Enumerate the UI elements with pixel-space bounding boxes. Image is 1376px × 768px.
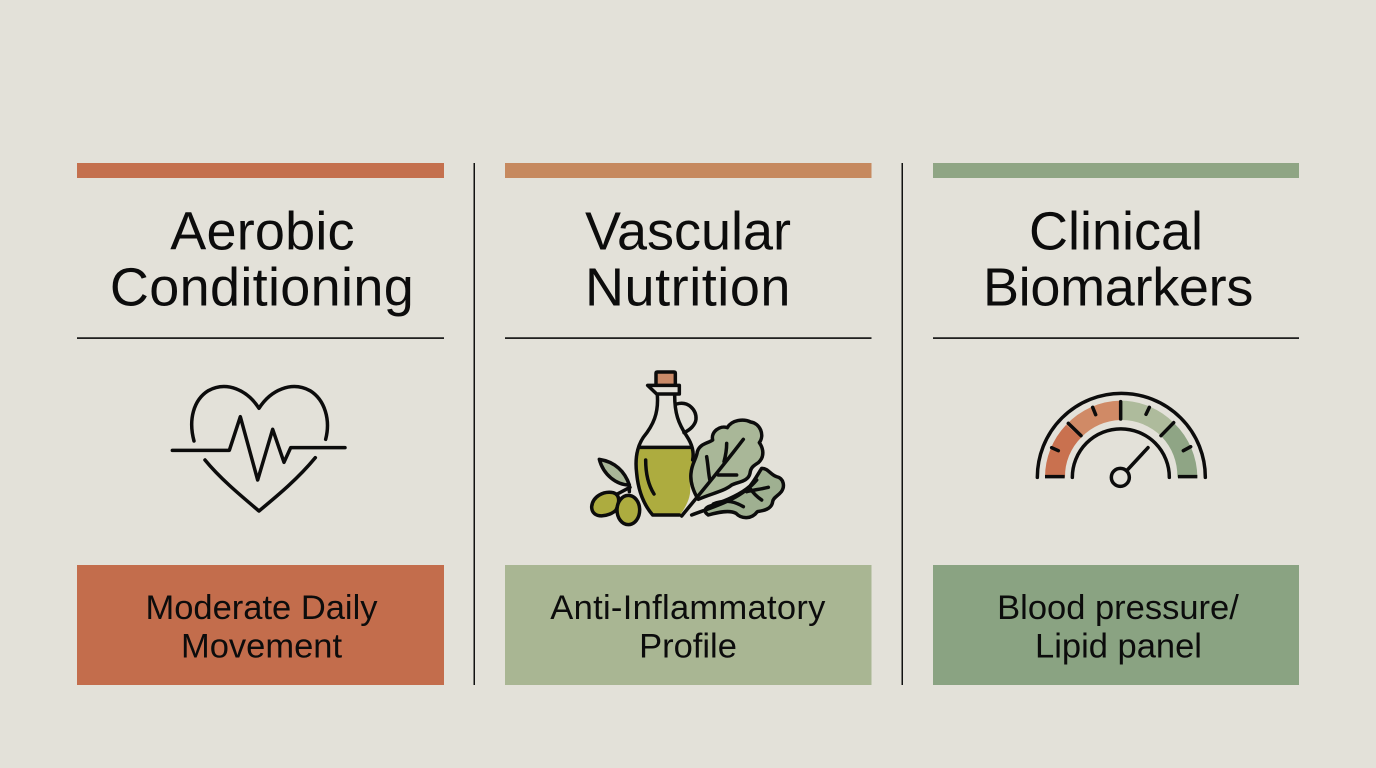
- accent bar: [77, 163, 444, 178]
- callout: Blood pressure / Lipid panel: Lipid panel: [1035, 628, 1202, 666]
- accent bar: [933, 163, 1299, 178]
- icon: blood pressure gauge: [1037, 393, 1205, 486]
- heading: Aerobic: [170, 202, 355, 262]
- callout: Blood pressure / Lipid panel: Blood pressure/: [997, 589, 1239, 627]
- callout: Moderate Daily Movement: [77, 565, 444, 685]
- callout: Moderate Daily Movement: Moderate Daily: [145, 589, 378, 627]
- panel: Vascular Nutrition: [505, 163, 872, 685]
- icon: heart with pulse: [172, 387, 345, 511]
- heading: Biomarkers: [983, 258, 1253, 318]
- callout: Anti-Inflammatory Profile: Anti-Inflammatory: [550, 589, 826, 627]
- accent bar: [505, 163, 872, 178]
- callout: Anti-Inflammatory Profile: [505, 565, 872, 685]
- callout: Moderate Daily Movement: Movement: [181, 628, 342, 666]
- panel: Clinical Biomarkers: [933, 163, 1299, 685]
- heading: Clinical: [1029, 202, 1203, 262]
- heading: Vascular: [585, 202, 791, 262]
- icon: olive oil bottle, olives and leaves: [592, 372, 783, 525]
- callout: Anti-Inflammatory Profile: Profile: [639, 628, 737, 666]
- heading: Conditioning: [110, 258, 414, 318]
- panel: Aerobic Conditioning: [77, 163, 444, 685]
- callout: Blood pressure / Lipid panel: [933, 565, 1299, 685]
- heading: Nutrition: [585, 258, 791, 318]
